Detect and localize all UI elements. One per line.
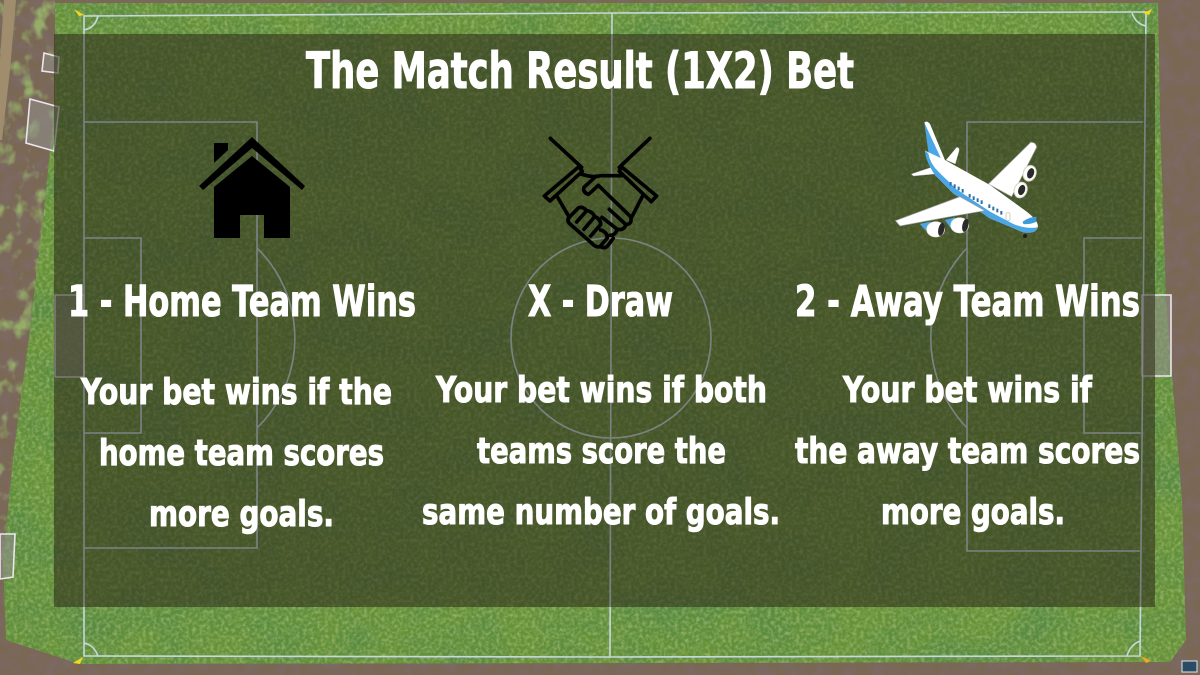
column 3: away team wins <box>795 122 1140 533</box>
description: away team: more goals. <box>881 492 1065 533</box>
icon: handshake <box>544 138 657 248</box>
corner flags <box>74 9 84 16</box>
description: home team: more goals. <box>149 494 334 535</box>
description: home team: home team scores <box>99 433 384 474</box>
description: draw: Your bet wins if both <box>435 370 767 411</box>
description: away team <box>795 370 1140 533</box>
description: home team: Your bet wins if the <box>80 372 392 413</box>
pitch markings seen through the panel <box>83 34 1146 607</box>
column 2: draw <box>422 138 780 533</box>
description: draw <box>422 370 780 533</box>
dark translucent panel <box>54 34 1155 607</box>
near engine pylons <box>920 222 933 233</box>
description: draw: same number of goals. <box>422 492 780 533</box>
icon: airplane <box>895 122 1038 238</box>
description: draw: teams score the <box>477 431 726 472</box>
heading: x - draw: X - Draw <box>528 277 673 327</box>
fuselage <box>925 151 1038 233</box>
heading: 1 - home team wins: 1 - Home Team Wins <box>68 277 416 327</box>
tail fins <box>946 147 959 164</box>
windows <box>950 182 1002 215</box>
column 1: home team wins <box>68 137 416 535</box>
description: home team <box>80 372 392 535</box>
icon: house <box>199 137 305 238</box>
far wing and engines <box>988 142 1037 197</box>
near wing <box>895 197 985 226</box>
title: The Match Result (1X2) Bet <box>306 42 854 100</box>
goals <box>0 53 1171 579</box>
description: away team: Your bet wins if <box>842 370 1092 411</box>
